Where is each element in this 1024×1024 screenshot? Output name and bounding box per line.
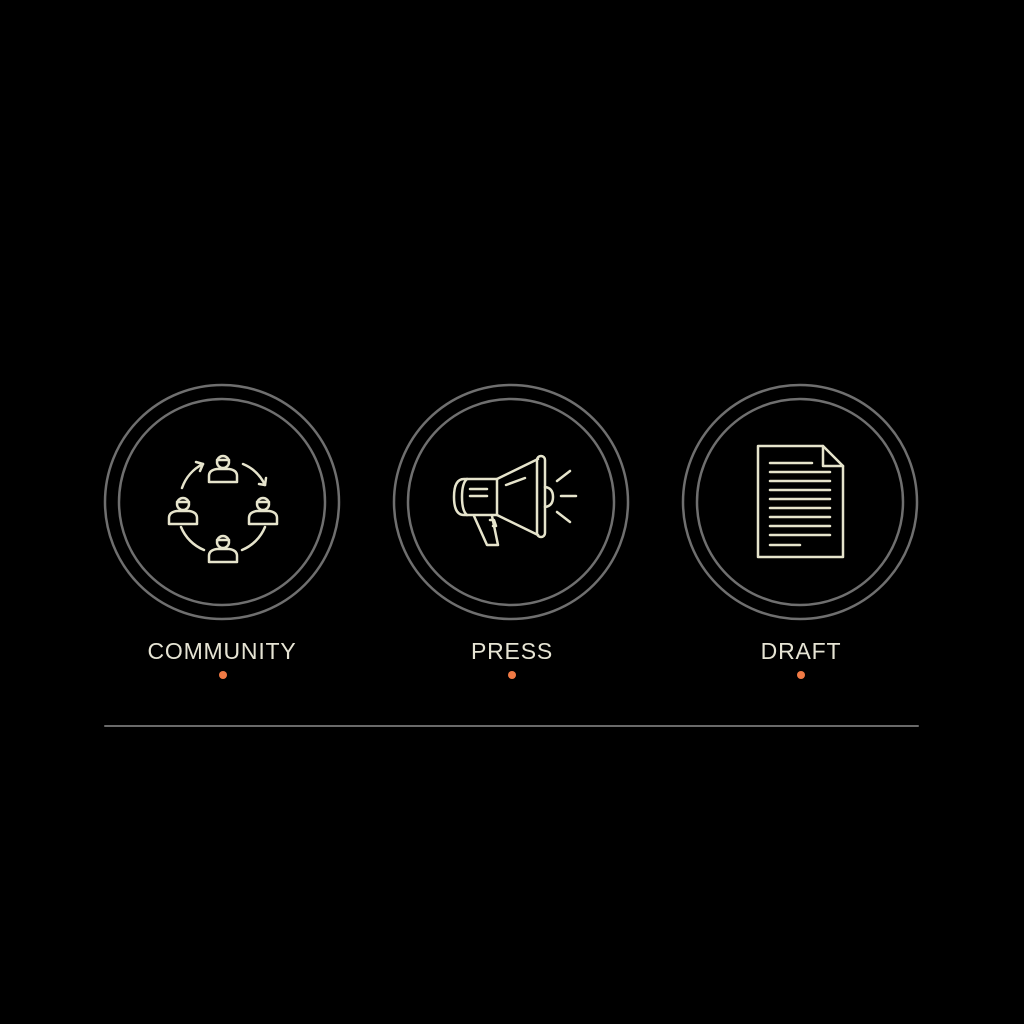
dot: community <box>219 671 227 679</box>
panel: press circle <box>394 385 628 619</box>
icon: megaphone <box>454 456 576 545</box>
dot: draft <box>797 671 805 679</box>
panel: community circle <box>105 385 339 619</box>
panel: draft circle <box>683 385 917 619</box>
icon: document <box>758 446 843 557</box>
dot: press <box>508 671 516 679</box>
label: draft: DRAFT <box>761 638 841 664</box>
divider line <box>105 725 918 727</box>
label: press: PRESS <box>471 638 553 664</box>
icon: community people cycle <box>169 456 277 562</box>
label: community: COMMUNITY <box>147 638 297 664</box>
